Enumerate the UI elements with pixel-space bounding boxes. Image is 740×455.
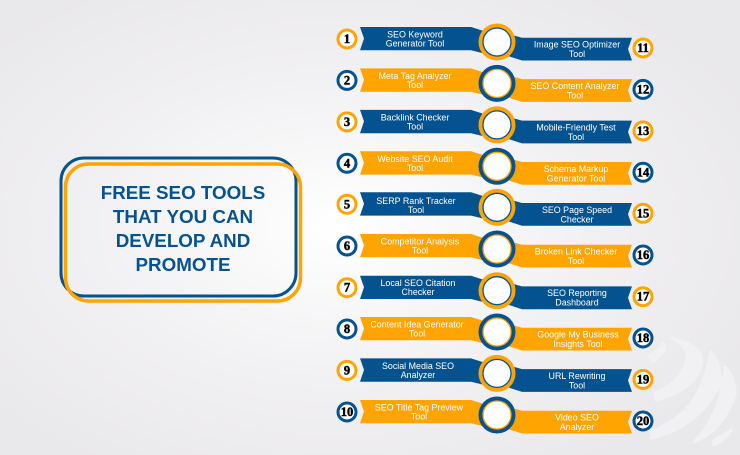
row 4: tools 4 and 14: Tool — [407, 163, 423, 173]
row 5: tools 5 and 15: SEO Page Speed — [542, 205, 612, 215]
row 5: tools 5 and 15: 5 — [344, 197, 350, 211]
row 9: tools 9 and 19: 19 — [637, 372, 649, 386]
row 10: tools 10 and 20: Tool — [411, 412, 427, 422]
row 1: tools 1 and 11: Image SEO Optimizer — [534, 40, 620, 50]
row 1: tools 1 and 11 — [338, 24, 652, 60]
row 8: tools 8 and 18: Tool — [409, 328, 425, 338]
row 4: tools 4 and 14 — [338, 148, 652, 185]
title: THAT YOU CAN — [113, 206, 253, 227]
row 5: tools 5 and 15: 15 — [637, 206, 649, 220]
row 8: tools 8 and 18: 8 — [344, 322, 350, 336]
row 3: tools 3 and 13: Backlink Checker — [381, 112, 449, 122]
row 8: tools 8 and 18: Content Idea Generator — [370, 320, 464, 330]
row 6: tools 6 and 16: Competitor Analysis — [381, 237, 460, 247]
row 2: tools 2 and 12: 2 — [344, 73, 350, 87]
row 4: tools 4 and 14: Generator Tool — [547, 173, 605, 183]
row 9: tools 9 and 19: Social Media SEO — [382, 361, 454, 371]
row 1: tools 1 and 11: Tool — [569, 49, 585, 59]
title — [101, 182, 265, 275]
row 9: tools 9 and 19: Analyzer — [401, 370, 435, 380]
row 3: tools 3 and 13: Mobile-Friendly Test — [536, 122, 616, 132]
title: FREE SEO TOOLS — [101, 182, 265, 203]
row 7: tools 7 and 17: SEO Reporting — [547, 288, 607, 298]
row 3: tools 3 and 13: Tool — [407, 121, 423, 131]
row 1: tools 1 and 11: 11 — [637, 41, 649, 55]
row 3: tools 3 and 13 — [338, 106, 652, 143]
row 9: tools 9 and 19: 9 — [344, 363, 350, 377]
row 2: tools 2 and 12: SEO Content Analyzer — [531, 81, 619, 91]
row 1: tools 1 and 11: 1 — [344, 32, 350, 46]
row 10: tools 10 and 20: 10 — [341, 405, 353, 419]
row 2: tools 2 and 12: 12 — [637, 82, 649, 96]
row 9: tools 9 and 19 — [338, 355, 652, 392]
row 4: tools 4 and 14: 14 — [637, 165, 650, 179]
row 3: tools 3 and 13: 13 — [637, 124, 649, 138]
row 6: tools 6 and 16: Broken Link Checker — [535, 246, 617, 256]
row 10: tools 10 and 20: SEO Title Tag Preview — [375, 402, 464, 412]
row 3: tools 3 and 13: Tool — [568, 132, 584, 142]
row 7: tools 7 and 17 — [338, 272, 652, 309]
row 5: tools 5 and 15: SERP Rank Tracker — [376, 196, 456, 206]
row 5: tools 5 and 15 — [338, 189, 652, 226]
title frame — [61, 158, 300, 301]
row 2: tools 2 and 12: Tool — [567, 90, 583, 100]
row 6: tools 6 and 16 — [338, 230, 652, 268]
row 9: tools 9 and 19: Tool — [569, 380, 585, 390]
row 8: tools 8 and 18 — [338, 314, 652, 350]
row 9: tools 9 and 19: URL Rewriting — [549, 371, 605, 381]
row 7: tools 7 and 17: 17 — [637, 290, 649, 304]
row 7: tools 7 and 17: Local SEO Citation — [381, 278, 456, 288]
row 6: tools 6 and 16: Tool — [568, 256, 584, 266]
row 7: tools 7 and 17: Checker — [401, 287, 435, 297]
row 7: tools 7 and 17: Dashboard — [555, 298, 599, 308]
row 7: tools 7 and 17: 7 — [344, 281, 350, 295]
row 10: tools 10 and 20: Video SEO — [555, 412, 599, 422]
row 3: tools 3 and 13: 3 — [344, 115, 350, 129]
row 4: tools 4 and 14: Website SEO Audit — [377, 154, 453, 164]
row 8: tools 8 and 18: Insights Tool — [553, 339, 603, 349]
row 5: tools 5 and 15: Tool — [408, 205, 424, 215]
title: PROMOTE — [136, 254, 230, 275]
row 1: tools 1 and 11: Generator Tool — [386, 38, 444, 48]
row 6: tools 6 and 16: 6 — [344, 239, 350, 253]
row 5: tools 5 and 15: Checker — [560, 214, 594, 224]
icon: faded globe — [649, 338, 735, 445]
row 1: tools 1 and 11: SEO Keyword — [387, 30, 443, 40]
row 6: tools 6 and 16: 16 — [637, 248, 649, 262]
row 2: tools 2 and 12: Tool — [407, 80, 423, 90]
row 6: tools 6 and 16: Tool — [412, 246, 428, 256]
row 8: tools 8 and 18: 18 — [637, 331, 649, 345]
row 10: tools 10 and 20: 20 — [637, 414, 649, 428]
row 10: tools 10 and 20 — [338, 396, 652, 434]
row 4: tools 4 and 14: Schema Markup — [544, 164, 608, 174]
row 2: tools 2 and 12 — [338, 65, 652, 102]
row 2: tools 2 and 12: Meta Tag Analyzer — [379, 71, 451, 81]
row 10: tools 10 and 20: Analyzer — [560, 422, 594, 432]
row 4: tools 4 and 14: 4 — [344, 156, 351, 170]
title: DEVELOP AND — [116, 230, 250, 251]
row 8: tools 8 and 18: Google My Business — [537, 330, 619, 340]
